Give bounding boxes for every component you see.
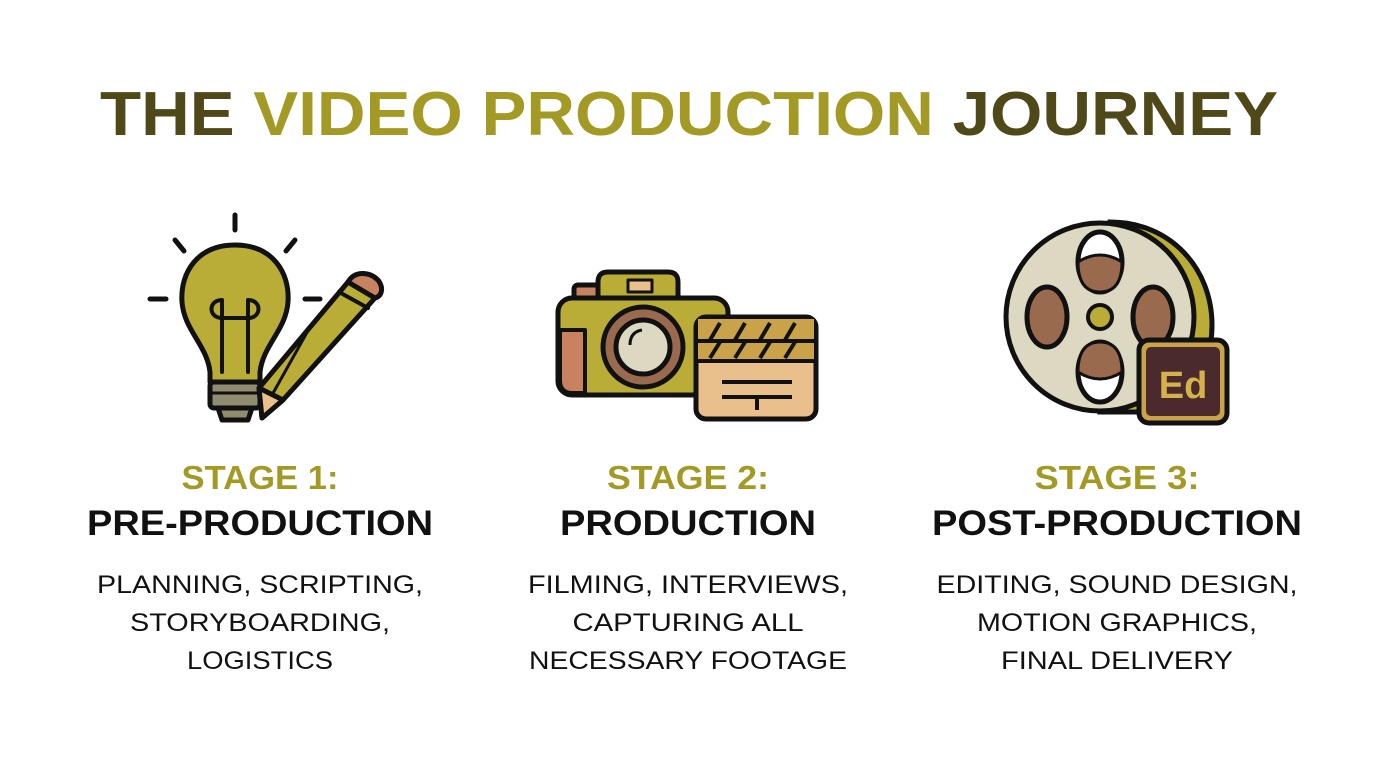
stage 2 text [528,459,848,675]
stage 2 text: NECESSARY FOOTAGE [529,647,847,675]
stage 3 text: POST-PRODUCTION [932,504,1302,543]
stage 3 text: EDITING, SOUND DESIGN, [936,571,1298,599]
stage 2 text: CAPTURING ALL [572,609,804,637]
stage 3 text: STAGE 3: [1034,459,1200,496]
stage 1 text: PRE-PRODUCTION [87,504,433,543]
stage 3 text: MOTION GRAPHICS, [977,609,1257,637]
stage 1 text [87,459,433,675]
stage 2 text: PRODUCTION [560,504,816,543]
icon: film reel with Ed badge: Ed [1159,365,1207,407]
icon: camera and clapperboard [558,272,816,419]
stage 3 text: FINAL DELIVERY [1001,647,1233,675]
stage 1 text: LOGISTICS [187,647,333,675]
stage 3 text [932,459,1302,675]
stage 2 text: FILMING, INTERVIEWS, [528,571,848,599]
stage 1 text: PLANNING, SCRIPTING, [97,571,423,599]
title: THE VIDEO PRODUCTION JOURNEY [100,80,1278,149]
icon: light bulb and pencil [150,215,382,420]
icon: film reel with Ed badge [1006,222,1227,423]
stage 2 text: STAGE 2: [607,459,769,496]
stage 1 text: STAGE 1: [182,459,338,496]
stage 1 text: STORYBOARDING, [130,609,390,637]
